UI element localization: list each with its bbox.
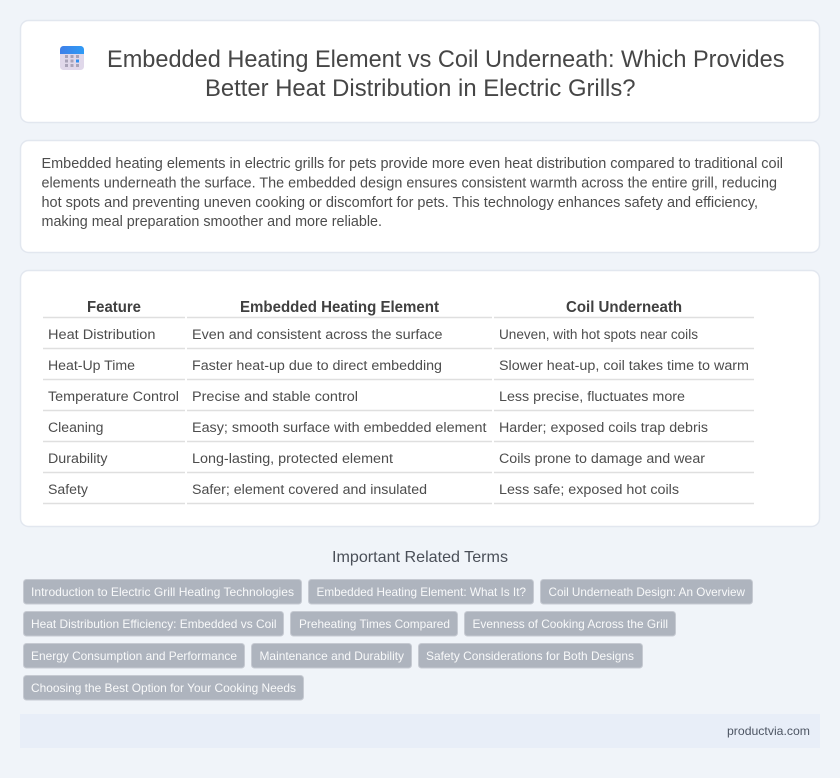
tag bbox=[252, 644, 412, 668]
table header: Coil Underneath bbox=[566, 299, 682, 316]
table header bbox=[87, 299, 682, 316]
tag bbox=[24, 644, 244, 668]
text block: summary: Embedded heating elements in electric grills for pets provide more even heat distribution compared to traditional coil bbox=[42, 156, 783, 172]
row: durability bbox=[48, 451, 705, 467]
heading: important related terms: Important Related Terms bbox=[332, 549, 508, 566]
row: heat-up time: Slower heat-up, coil takes time to warm bbox=[499, 358, 749, 374]
row: cleaning: Harder; exposed coils trap debris bbox=[499, 420, 708, 436]
tag: Heat Distribution Efficiency: Embedded vs Coil bbox=[31, 617, 276, 631]
tag: Introduction to Electric Grill Heating Technologies bbox=[31, 585, 294, 599]
footer bar: productvia.com bbox=[727, 724, 810, 738]
row: durability: Coils prone to damage and wear bbox=[499, 451, 705, 467]
row: temperature control: Temperature Control bbox=[48, 389, 179, 405]
icon: calendar bbox=[60, 46, 84, 70]
text block: summary: elements underneath the surface. The embedded design ensures consistent warmth across the entire grill, reducing bbox=[42, 176, 777, 192]
tag: Coil Underneath Design: An Overview bbox=[548, 585, 745, 599]
table header: Feature bbox=[87, 299, 141, 316]
title: Embedded Heating Element vs Coil Underneath: Which Provides bbox=[107, 46, 784, 73]
tag bbox=[24, 676, 304, 700]
tag bbox=[24, 580, 302, 604]
row: heat distribution bbox=[48, 327, 698, 343]
tag bbox=[290, 612, 458, 636]
title: Better Heat Distribution in Electric Grills? bbox=[205, 75, 636, 102]
table header: Embedded Heating Element bbox=[240, 299, 439, 316]
text block: summary: making meal preparation smoother and more reliable. bbox=[42, 214, 382, 230]
tag group: related terms bbox=[24, 580, 752, 700]
row: durability: Long-lasting, protected element bbox=[192, 451, 393, 467]
tag: Embedded Heating Element: What Is It? bbox=[316, 585, 526, 599]
row: cleaning bbox=[48, 420, 708, 436]
footer bar bbox=[20, 714, 820, 748]
tag bbox=[24, 612, 284, 636]
tag bbox=[540, 580, 752, 604]
row: heat distribution: Uneven, with hot spots near coils bbox=[499, 327, 698, 343]
row: safety: Safety bbox=[48, 482, 89, 498]
row: temperature control bbox=[48, 389, 685, 405]
row: heat-up time bbox=[48, 358, 749, 374]
panel: title header bbox=[20, 20, 820, 122]
row: heat distribution: Even and consistent across the surface bbox=[192, 327, 443, 343]
title bbox=[107, 46, 784, 102]
row: heat distribution: Heat Distribution bbox=[48, 327, 156, 343]
text block: summary: hot spots and preventing uneven cooking or discomfort for pets. This technology enhances safety and efficiency, bbox=[42, 195, 758, 211]
row: temperature control: Precise and stable control bbox=[192, 389, 358, 405]
row: cleaning: Easy; smooth surface with embedded element bbox=[192, 420, 487, 436]
tag bbox=[418, 644, 642, 668]
panel: summary paragraph bbox=[20, 140, 820, 252]
panel: comparison table bbox=[20, 270, 820, 526]
row: heat-up time: Faster heat-up due to direct embedding bbox=[192, 358, 442, 374]
tag: Choosing the Best Option for Your Cooking Needs bbox=[31, 681, 296, 695]
tag bbox=[464, 612, 676, 636]
tag: Safety Considerations for Both Designs bbox=[426, 649, 634, 663]
tag: Maintenance and Durability bbox=[260, 649, 404, 663]
row: safety: Safer; element covered and insulated bbox=[192, 482, 427, 498]
row: durability: Durability bbox=[48, 451, 108, 467]
row: heat-up time: Heat-Up Time bbox=[48, 358, 135, 374]
row: cleaning: Cleaning bbox=[48, 420, 104, 436]
row: safety bbox=[48, 482, 679, 498]
tag: Preheating Times Compared bbox=[299, 617, 450, 631]
tag: Energy Consumption and Performance bbox=[31, 649, 237, 663]
row: temperature control: Less precise, fluctuates more bbox=[499, 389, 685, 405]
text block: summary bbox=[42, 156, 783, 230]
tag: Evenness of Cooking Across the Grill bbox=[472, 617, 668, 631]
row: safety: Less safe; exposed hot coils bbox=[499, 482, 679, 498]
tag bbox=[308, 580, 534, 604]
